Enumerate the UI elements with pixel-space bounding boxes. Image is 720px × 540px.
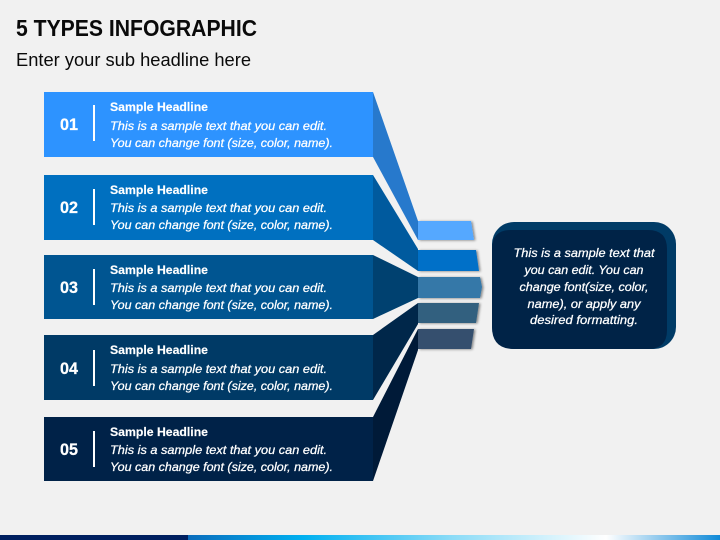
body text 05	[110, 443, 333, 474]
tab 01	[418, 221, 474, 240]
body text 02	[110, 201, 333, 232]
divider 05	[93, 431, 95, 467]
body text 03	[110, 281, 333, 312]
connector 01	[373, 92, 418, 240]
divider 02	[93, 189, 95, 225]
body text 01: You can change font (size, color, name).	[110, 136, 333, 150]
body text 01	[110, 119, 333, 150]
bar 02	[44, 175, 373, 240]
callout text: name), or apply any	[528, 297, 642, 311]
bar 03	[44, 255, 373, 319]
panel: type 03	[44, 255, 418, 319]
body text 04: You can change font (size, color, name).	[110, 379, 333, 393]
divider 03	[93, 269, 95, 305]
body text 05: You can change font (size, color, name).	[110, 460, 333, 474]
number 01: 01	[60, 116, 78, 134]
tab 05	[418, 329, 474, 349]
panel: type 05	[44, 329, 418, 481]
callout card	[492, 222, 676, 349]
tab 04	[418, 303, 479, 323]
connector 03	[373, 255, 418, 319]
body text 04	[110, 362, 333, 393]
headline 05: Sample Headline	[110, 425, 208, 439]
title: 5 TYPES INFOGRAPHIC	[16, 15, 257, 41]
footer bar	[0, 535, 720, 540]
panel: type 01	[44, 92, 418, 240]
callout text: This is a sample text that	[514, 246, 655, 260]
number 04: 04	[60, 360, 79, 378]
subtitle: Enter your sub headline here	[16, 50, 251, 70]
number 03: 03	[60, 279, 78, 297]
number 05: 05	[60, 441, 78, 459]
card back	[492, 222, 676, 349]
callout text: change font(size, color,	[520, 280, 648, 294]
body text 02: This is a sample text that you can edit.	[110, 201, 327, 215]
body text 04: This is a sample text that you can edit.	[110, 362, 327, 376]
body text 01: This is a sample text that you can edit.	[110, 119, 327, 133]
body text 02: You can change font (size, color, name).	[110, 218, 333, 232]
bar 01	[44, 92, 373, 157]
body text 05: This is a sample text that you can edit.	[110, 443, 327, 457]
card front	[492, 230, 667, 349]
connector 04	[373, 303, 418, 400]
divider 04	[93, 350, 95, 386]
headline 01: Sample Headline	[110, 100, 208, 114]
callout text: desired formatting.	[530, 313, 638, 327]
panel: type 02	[44, 175, 418, 271]
connector 05	[373, 329, 418, 481]
body text 03: This is a sample text that you can edit.	[110, 281, 327, 295]
headline 03: Sample Headline	[110, 263, 208, 277]
body text 03: You can change font (size, color, name).	[110, 298, 333, 312]
tab 03	[418, 277, 482, 298]
connector 02	[373, 175, 418, 271]
divider 01	[93, 105, 95, 141]
callout text	[514, 246, 655, 327]
number 02: 02	[60, 199, 78, 217]
tab 02	[418, 250, 479, 271]
headline 02: Sample Headline	[110, 183, 208, 197]
panel: type 04	[44, 303, 418, 400]
headline 04: Sample Headline	[110, 343, 208, 357]
bar 05	[44, 417, 373, 481]
callout text: you can edit. You can	[523, 263, 644, 277]
bar 04	[44, 335, 373, 400]
